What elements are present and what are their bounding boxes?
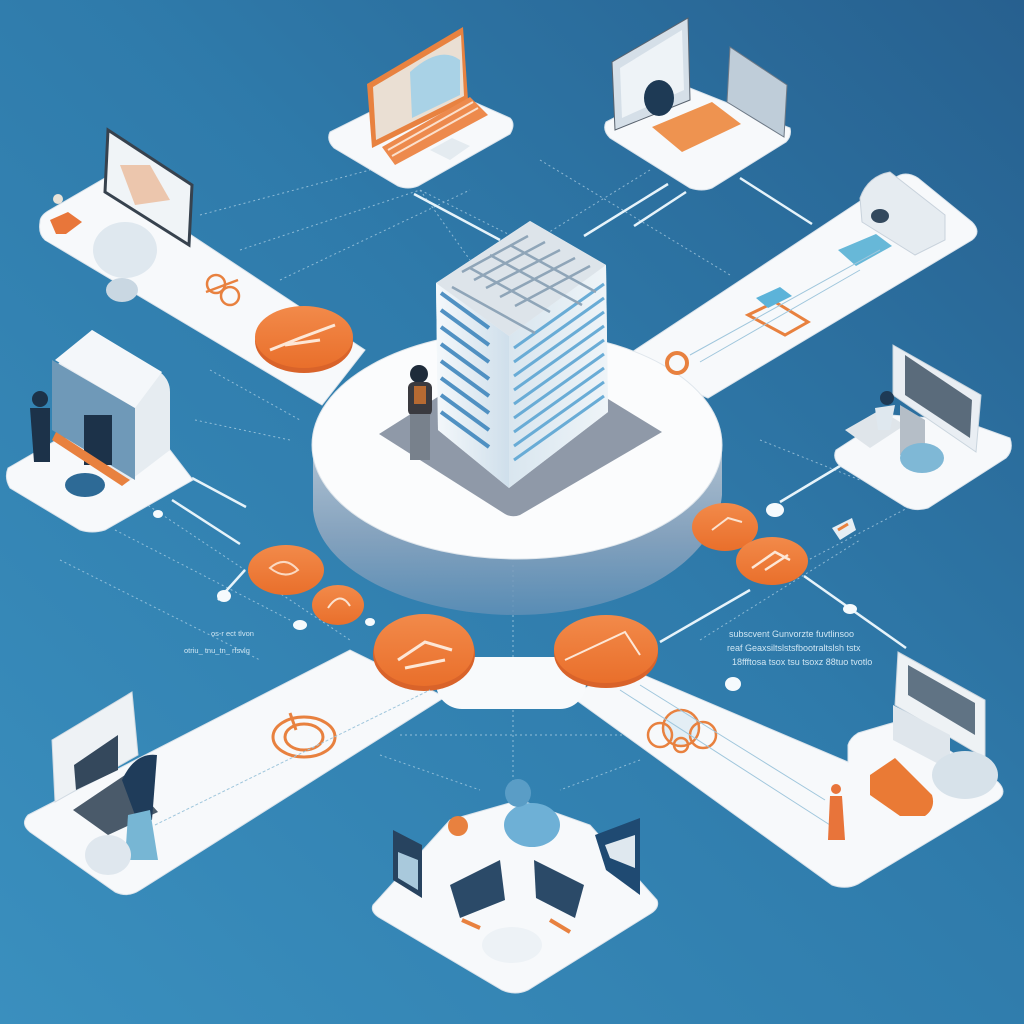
orange disc top-left [255,306,353,373]
caption right [727,629,872,667]
right panel [595,818,640,895]
orange figure [828,784,845,840]
panel: bottom connector [436,657,586,709]
left monitor [450,860,505,918]
tablet [52,692,138,802]
caption right: 18ffftosa tsox tsu tsoxz 88tuo tvotlo [732,657,872,667]
panel: bottom-left arm [24,650,445,895]
panel: top-right station [605,18,790,190]
glass sphere [93,222,157,278]
caption left [184,629,254,655]
platform side [313,440,722,615]
laptop [73,775,158,835]
icon: top-left arm knot [206,275,239,305]
icon: top-right arm nodes [667,234,892,373]
icon: small device right [832,518,856,540]
building [436,221,608,488]
panel: right station [835,345,1011,510]
caption left: otriu_ tnu_tn_ rfsvlg [184,646,250,655]
panel: central platform [312,331,722,615]
left panel [393,830,422,898]
orange disc left 2 [312,585,364,625]
arm line: bottom-right [620,685,830,825]
orange disc right 1 [692,503,758,551]
panel: bottom station [372,779,658,993]
orange disc bottom-left [373,614,475,691]
orange tag [50,212,82,234]
laptop screen [367,27,468,148]
panel: bottom-right arm [572,665,1003,887]
tablet [105,130,192,245]
orange device [870,758,933,816]
figure near building [408,365,432,460]
panel: left station [6,330,193,532]
icon: bottom-left arm ring [273,713,335,757]
caption right: reaf Geaxsiltslstsfbootraltslsh tstx [727,643,861,653]
caption left: os-r ect tlvon [211,629,254,638]
panel: bottom-right station [870,652,998,816]
panel: top-right arm [632,174,977,398]
panel: top-right arm device [860,172,945,255]
seated figure [84,415,112,465]
figure [644,80,674,116]
tablet right [727,47,787,137]
monitor [893,345,981,452]
right monitor [534,860,584,918]
panel: top-left station [40,130,192,302]
orange mat [652,102,741,152]
panel: bottom-left station [52,692,158,875]
desk items [845,410,905,448]
figure [125,810,158,860]
connector lines with nodes [153,178,906,691]
icon: bottom-right arm flower [648,710,716,752]
network lines [60,160,980,800]
grey base [379,345,662,516]
kiosk [52,330,170,482]
caption right: subscvent Gunvorzte fuvtlinsoo [729,629,854,639]
figure [30,391,50,462]
orange disc bottom-right [554,615,658,688]
panel: top-left arm [40,178,365,405]
blue dome [504,803,560,847]
arm line: bottom-left [155,690,430,825]
panel: top laptop station [329,27,513,188]
platform top [312,331,722,559]
orange disc left 1 [248,545,324,595]
tablet left [612,18,690,130]
orange disc right 2 [736,537,808,585]
laptop keyboard [382,97,488,165]
